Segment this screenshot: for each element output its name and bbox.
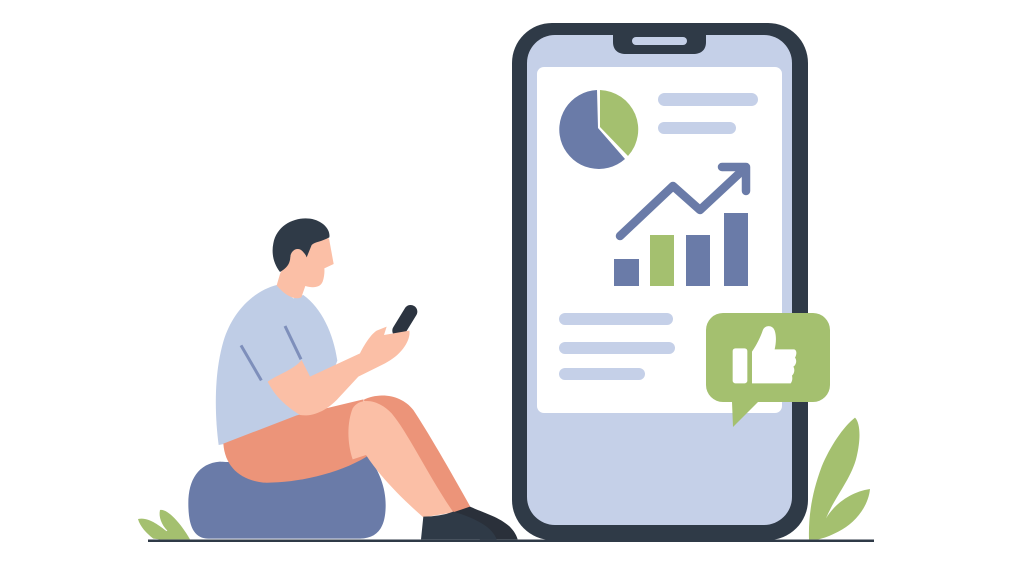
shoes	[421, 507, 518, 539]
shirt	[216, 285, 337, 445]
phone	[512, 23, 808, 540]
lower text lines	[559, 313, 675, 380]
white card	[537, 67, 782, 413]
head and neck	[277, 237, 334, 298]
person	[188, 218, 518, 539]
ear	[290, 249, 305, 267]
speaker	[632, 37, 687, 45]
right plant	[809, 418, 870, 539]
notch	[613, 35, 706, 54]
trend arrow	[620, 167, 746, 236]
hair	[273, 218, 329, 272]
far leg	[363, 396, 471, 517]
bar chart	[614, 213, 748, 286]
bubble	[706, 313, 830, 427]
phone frame	[512, 23, 808, 540]
beanbag	[188, 455, 386, 539]
left plant	[138, 510, 190, 539]
arm	[268, 327, 410, 415]
handheld phone	[399, 312, 411, 331]
shirt fold lines	[241, 326, 301, 380]
top text lines	[658, 93, 758, 134]
phone screen	[527, 35, 792, 525]
icon: thumbs up	[733, 326, 796, 383]
thumbs up bubble	[706, 313, 830, 427]
shorts	[223, 399, 367, 483]
near leg	[348, 401, 453, 517]
ground line	[148, 540, 874, 542]
pie chart	[559, 90, 638, 169]
